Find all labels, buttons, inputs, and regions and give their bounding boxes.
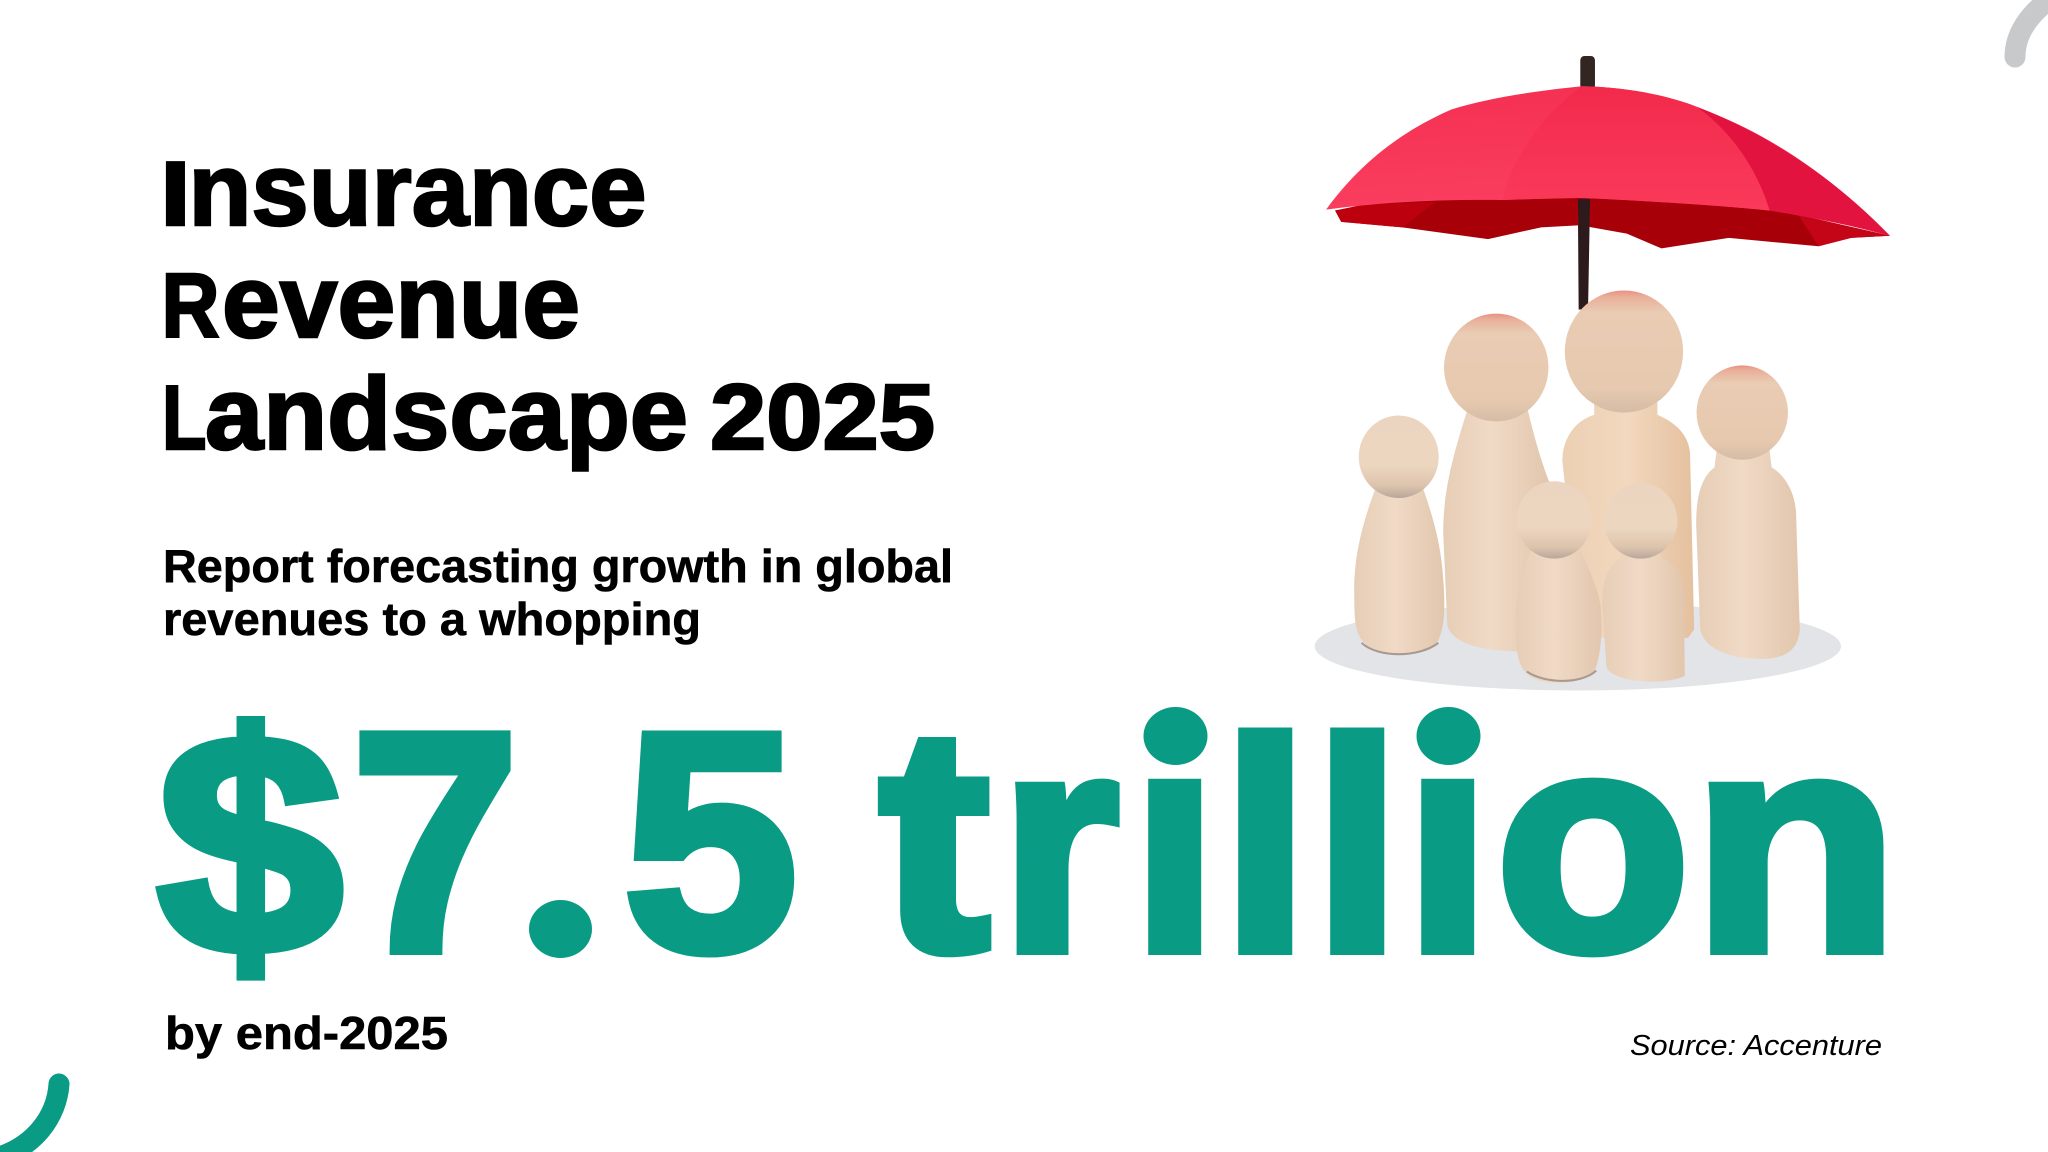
headline figure: $7.5 trillion: n: [1692, 671, 1899, 1016]
umbrella pole: [1578, 198, 1590, 309]
headline figure: $7.5 trillion: i: [1121, 653, 1228, 1026]
headline figure: $7.5 trillion: i: [1394, 653, 1502, 1026]
subtitle: Report forecasting growth in global: [163, 540, 953, 592]
canopy outer: [1326, 86, 1890, 236]
headline figure: $7.5 trillion: 7: [351, 669, 519, 1017]
canopy pole overlay: [1578, 199, 1590, 229]
source note: Source: Accenture: [1630, 1030, 1882, 1062]
illustration: umbrella over wooden family figures: [1315, 56, 1890, 690]
headline figure: $7.5 trillion: [157, 653, 1899, 1026]
headline figure: $7.5 trillion: .: [524, 710, 597, 1003]
title: L: [162, 368, 206, 469]
figure: small front left: [1515, 481, 1601, 683]
headline figure: $7.5 trillion: $: [157, 672, 343, 1020]
title: R: [162, 256, 220, 357]
headline figure: $7.5 trillion: 5: [623, 668, 798, 1016]
caption: by end-2025: by end-2025: [165, 1007, 448, 1059]
headline figure: $7.5 trillion: o: [1497, 671, 1689, 1013]
umbrella tip: [1580, 56, 1595, 90]
decorative arc: top right: [2015, 0, 2048, 57]
canopy underside right lit panel: [1798, 215, 1890, 246]
headline figure: $7.5 trillion: r: [1000, 671, 1119, 1016]
headline figure: $7.5 trillion: l: [1303, 671, 1412, 1022]
figure: big centre-right: [1562, 290, 1694, 638]
decorative arc: bottom left: [0, 1084, 59, 1152]
headline figure: $7.5 trillion: t: [879, 662, 990, 1018]
ground shadow: [1315, 602, 1841, 690]
figure: small far left: [1354, 416, 1444, 655]
title: I: [160, 144, 191, 245]
title: andscape: [205, 356, 688, 471]
figure: tall left: [1443, 314, 1549, 651]
title: 2025: [710, 365, 935, 469]
subtitle: revenues to a whopping: [163, 593, 701, 645]
headline figure: $7.5 trillion: l: [1211, 671, 1320, 1022]
canopy centre panel: [1502, 86, 1770, 211]
subtitle: [163, 540, 953, 645]
figure: right: [1696, 365, 1800, 659]
title: evenue: [222, 244, 580, 359]
figure: small front right: [1602, 483, 1685, 682]
canopy underside: [1335, 196, 1890, 248]
canopy right panel: [1696, 107, 1890, 236]
title: nsurance: [188, 132, 646, 247]
title: [160, 132, 935, 471]
umbrella: [1326, 56, 1890, 309]
canopy underside left lit panel: [1335, 202, 1435, 227]
